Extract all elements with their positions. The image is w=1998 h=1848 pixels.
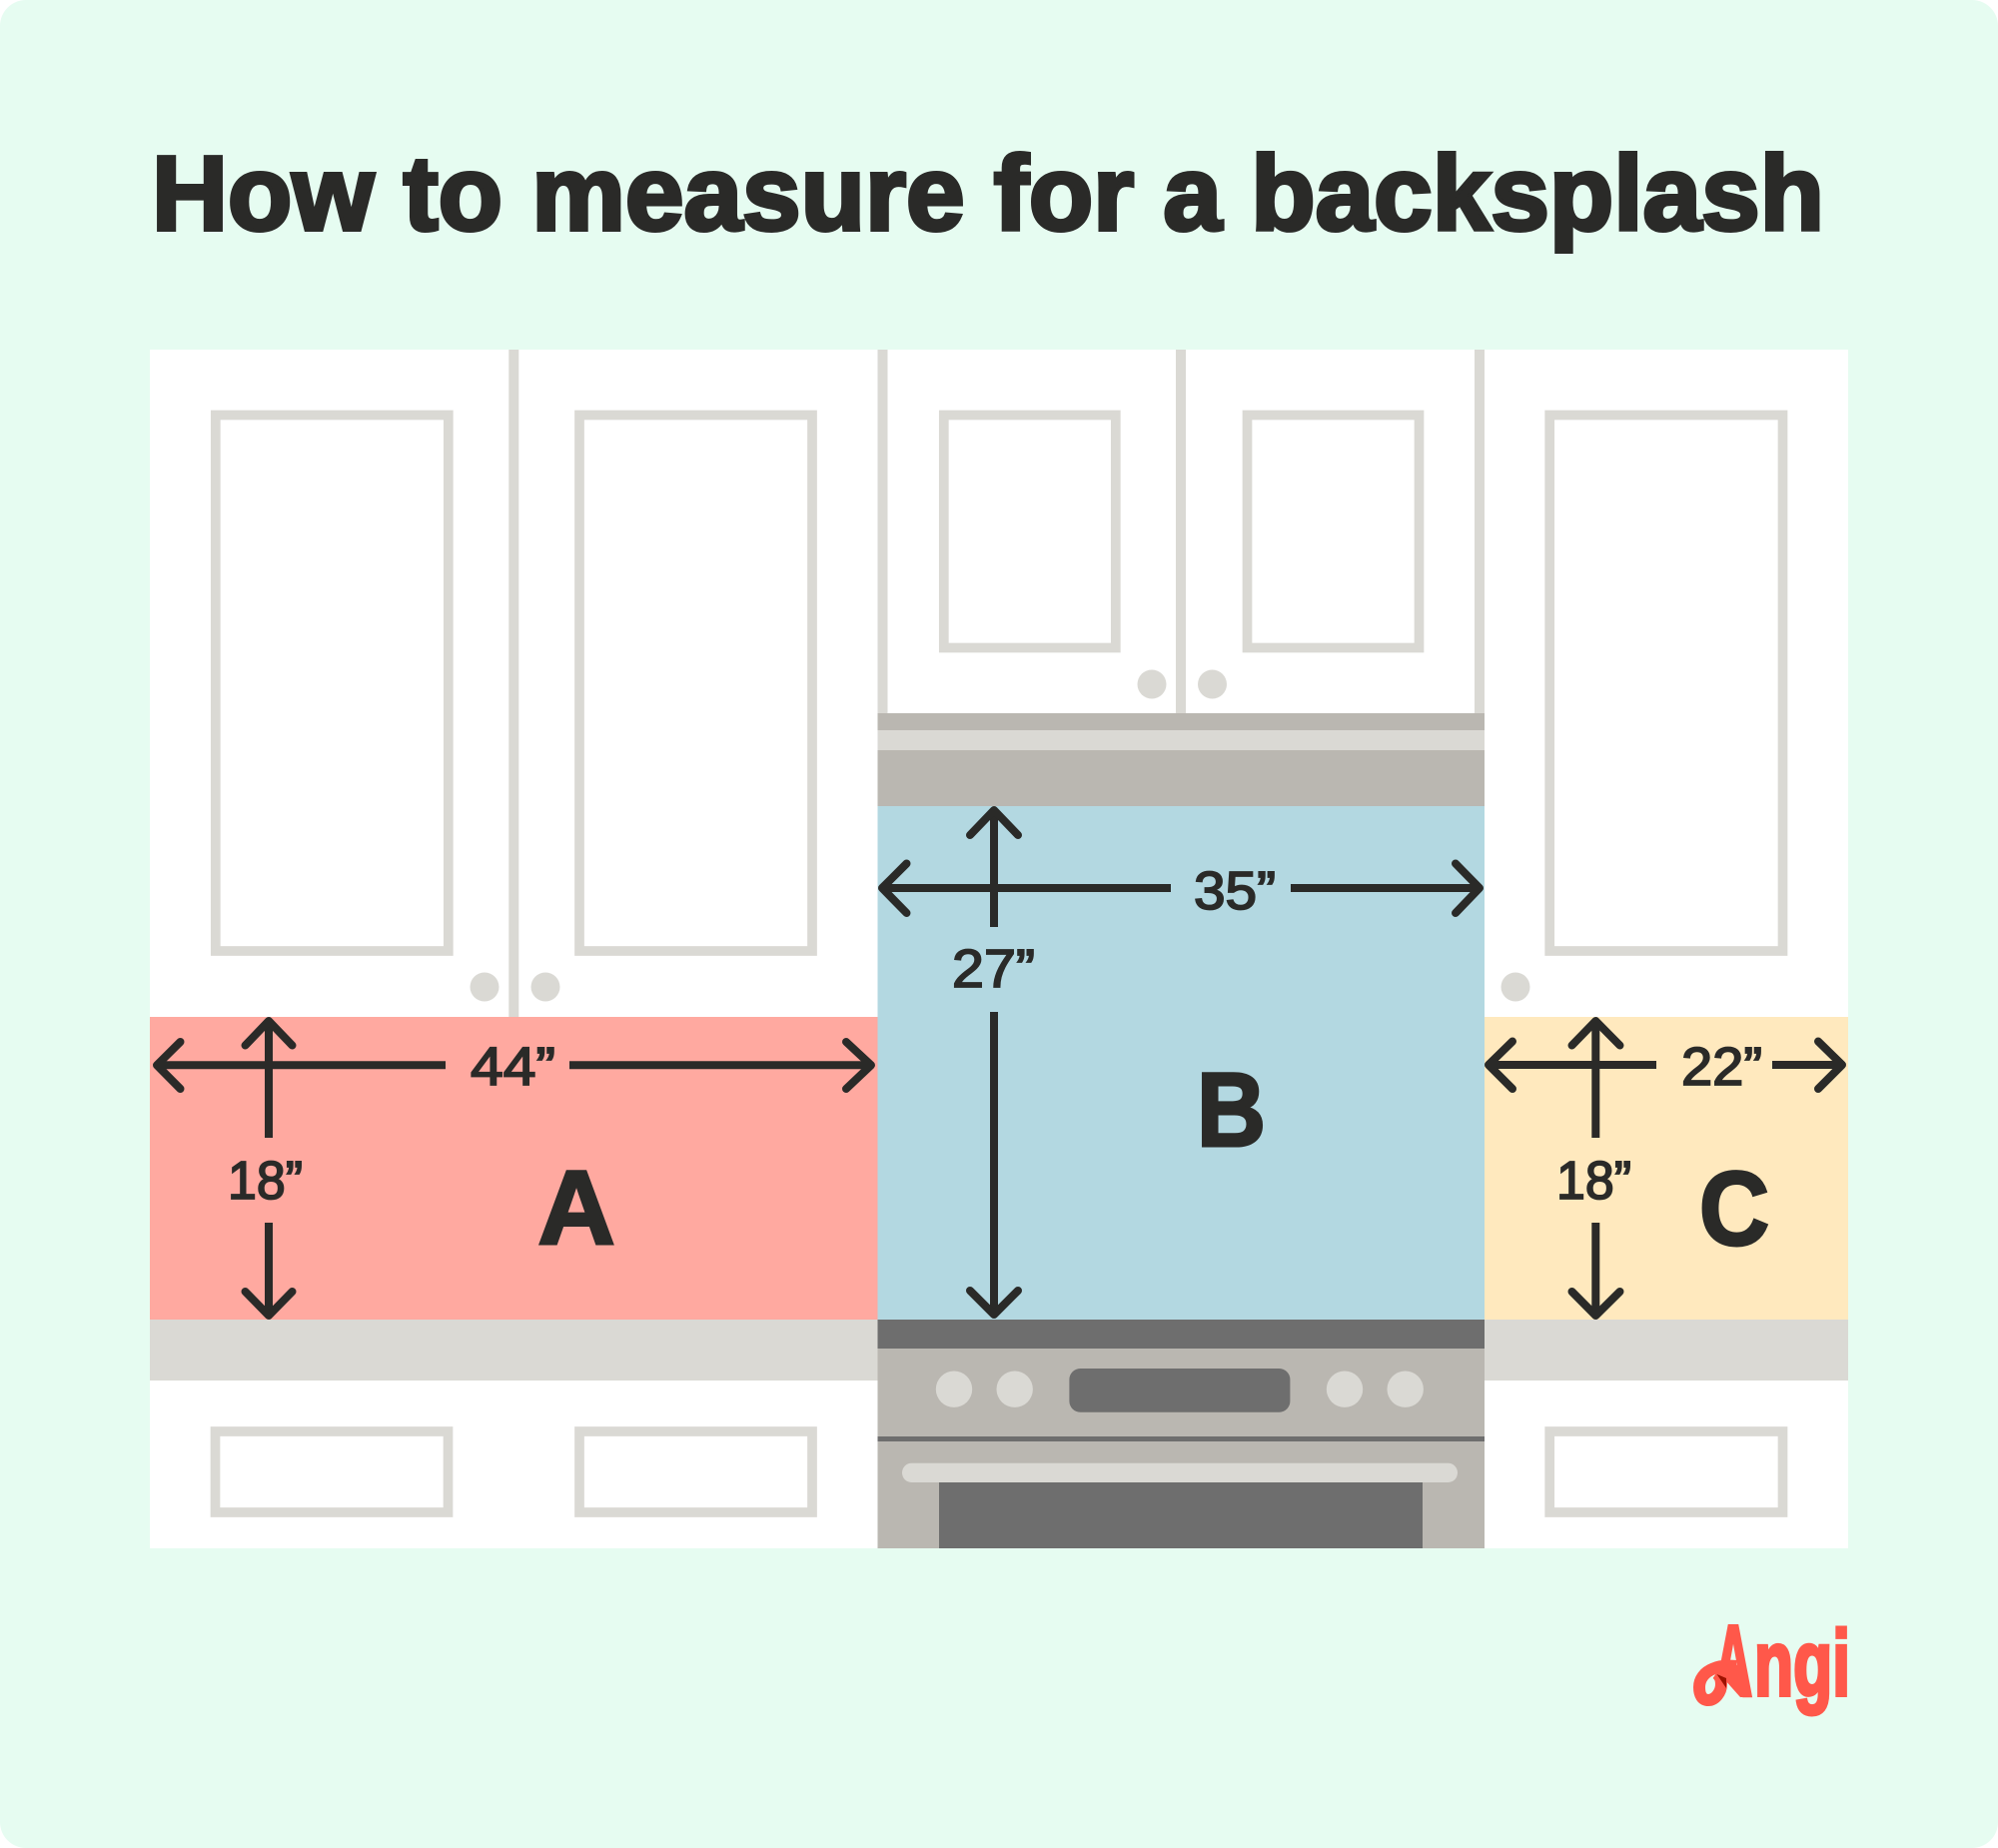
- label: 22 inches: 22”: [1681, 1037, 1762, 1097]
- letter C: C: [1699, 1151, 1769, 1268]
- logo swash: [1699, 1666, 1736, 1700]
- label: 18 inches: 18”: [228, 1151, 303, 1211]
- arrow: A width: [156, 1042, 872, 1089]
- logo: Angi: [1693, 1624, 1847, 1716]
- base cabinets: [150, 1381, 1848, 1548]
- section C backsplash: [1485, 1017, 1848, 1320]
- letter B: B: [1197, 1052, 1266, 1169]
- logo: Angi: ngi: [1754, 1611, 1850, 1715]
- arrow: A height: [246, 1021, 292, 1316]
- arrow: B height: [970, 810, 1018, 1315]
- range hood: [877, 713, 1485, 806]
- label: 27 inches: 27”: [952, 939, 1035, 999]
- countertops: [150, 1320, 1848, 1381]
- section B measurements: [882, 810, 1480, 1315]
- logo: Angi: A: [1714, 1605, 1752, 1717]
- label: 44 inches: 44”: [471, 1037, 555, 1097]
- section C measurements: [1489, 1021, 1842, 1316]
- section B backsplash: [877, 806, 1485, 1320]
- section A measurements: [156, 1021, 872, 1316]
- section A backsplash: [150, 1017, 877, 1320]
- stove: [877, 1320, 1485, 1548]
- letter A: A: [537, 1150, 615, 1267]
- label: 35 inches: 35”: [1194, 861, 1276, 921]
- arrow: B width: [882, 863, 1480, 913]
- title: How to measure for a backsplash: [152, 135, 1824, 253]
- label: 18 inches: 18”: [1556, 1151, 1631, 1211]
- arrow: C width: [1489, 1041, 1842, 1089]
- arrow: C height: [1572, 1021, 1620, 1316]
- kitchen illustration: [150, 350, 1848, 1548]
- upper cabinets: [150, 350, 1848, 1017]
